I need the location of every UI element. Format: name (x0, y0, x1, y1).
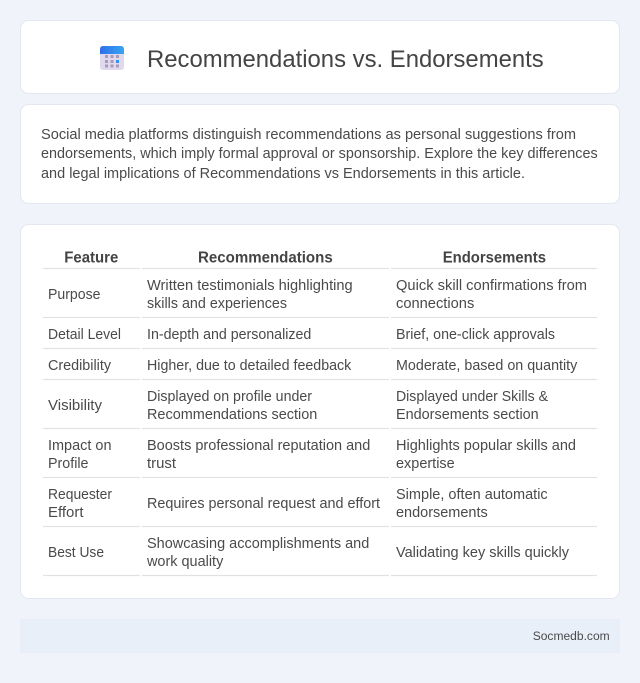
row: Best Use (48, 536, 570, 570)
row: Detail Level: Brief, one-click approvals (396, 327, 555, 343)
row: Requester Effort: Requires personal request and effort (147, 496, 380, 512)
table header row: Recommendations (198, 250, 333, 266)
footer bar (20, 619, 620, 653)
table header row (64, 250, 546, 266)
footer source text: Socmedb.com (533, 629, 610, 643)
intro text: and legal implications of Recommendations vs Endorsements in this article. (41, 166, 525, 182)
row: Purpose: Purpose (48, 287, 100, 303)
panel: title header (20, 20, 620, 94)
row: Requester Effort: endorsements (396, 505, 488, 521)
row: Impact on Profile: trust (147, 456, 176, 472)
row: Impact on Profile: expertise (396, 456, 455, 472)
row: Best Use: Best Use (48, 545, 104, 561)
row: Impact on Profile (48, 438, 576, 472)
intro text: endorsements, which imply formal approval or sponsorship. Explore the key differences (41, 146, 598, 162)
row: Visibility: Endorsements section (396, 407, 539, 423)
row: Visibility: Visibility (48, 398, 103, 414)
row: Best Use: work quality (146, 554, 224, 570)
row: Impact on Profile: Highlights popular skills and (396, 438, 576, 454)
panel: introduction (20, 104, 620, 204)
table header row: Feature (64, 250, 119, 266)
row: Detail Level: Detail Level (48, 327, 121, 343)
row: Credibility: Higher, due to detailed feedback (147, 358, 352, 374)
row: Detail Level: In-depth and personalized (147, 327, 311, 343)
row: Credibility: Moderate, based on quantity (396, 358, 578, 374)
row: Detail Level (48, 327, 555, 343)
row: Impact on Profile: Impact on (48, 438, 112, 454)
row: Purpose: Quick skill confirmations from (396, 278, 587, 294)
row: Credibility: Credibility (48, 358, 112, 374)
row: Requester Effort: Effort (48, 505, 84, 521)
intro text: Social media platforms distinguish recommendations as personal suggestions from (41, 127, 576, 143)
row: Impact on Profile: Profile (48, 456, 88, 472)
title: Recommendations vs. Endorsements (147, 46, 544, 73)
row: Impact on Profile: Boosts professional reputation and (147, 438, 370, 454)
row: Visibility: Recommendations section (147, 407, 317, 423)
panel: comparison table (20, 224, 620, 598)
row: Credibility (48, 358, 578, 374)
row: Visibility: Displayed under Skills & (396, 389, 548, 405)
row: Purpose: connections (396, 296, 474, 312)
table header row: Endorsements (443, 250, 546, 266)
row: Purpose (48, 278, 587, 312)
row: Purpose: Written testimonials highlighting (147, 278, 353, 294)
intro text (41, 127, 598, 182)
row: Best Use: Validating key skills quickly (396, 545, 570, 561)
row: Best Use: Showcasing accomplishments and (147, 536, 369, 552)
row: Requester Effort: Requester (48, 487, 112, 503)
icon: calendar (100, 46, 124, 70)
row: Requester Effort (48, 487, 548, 521)
row: Visibility (48, 389, 548, 423)
row: Visibility: Displayed on profile under (147, 389, 312, 405)
row: Purpose: skills and experiences (147, 296, 287, 312)
row: Requester Effort: Simple, often automatic (396, 487, 548, 503)
